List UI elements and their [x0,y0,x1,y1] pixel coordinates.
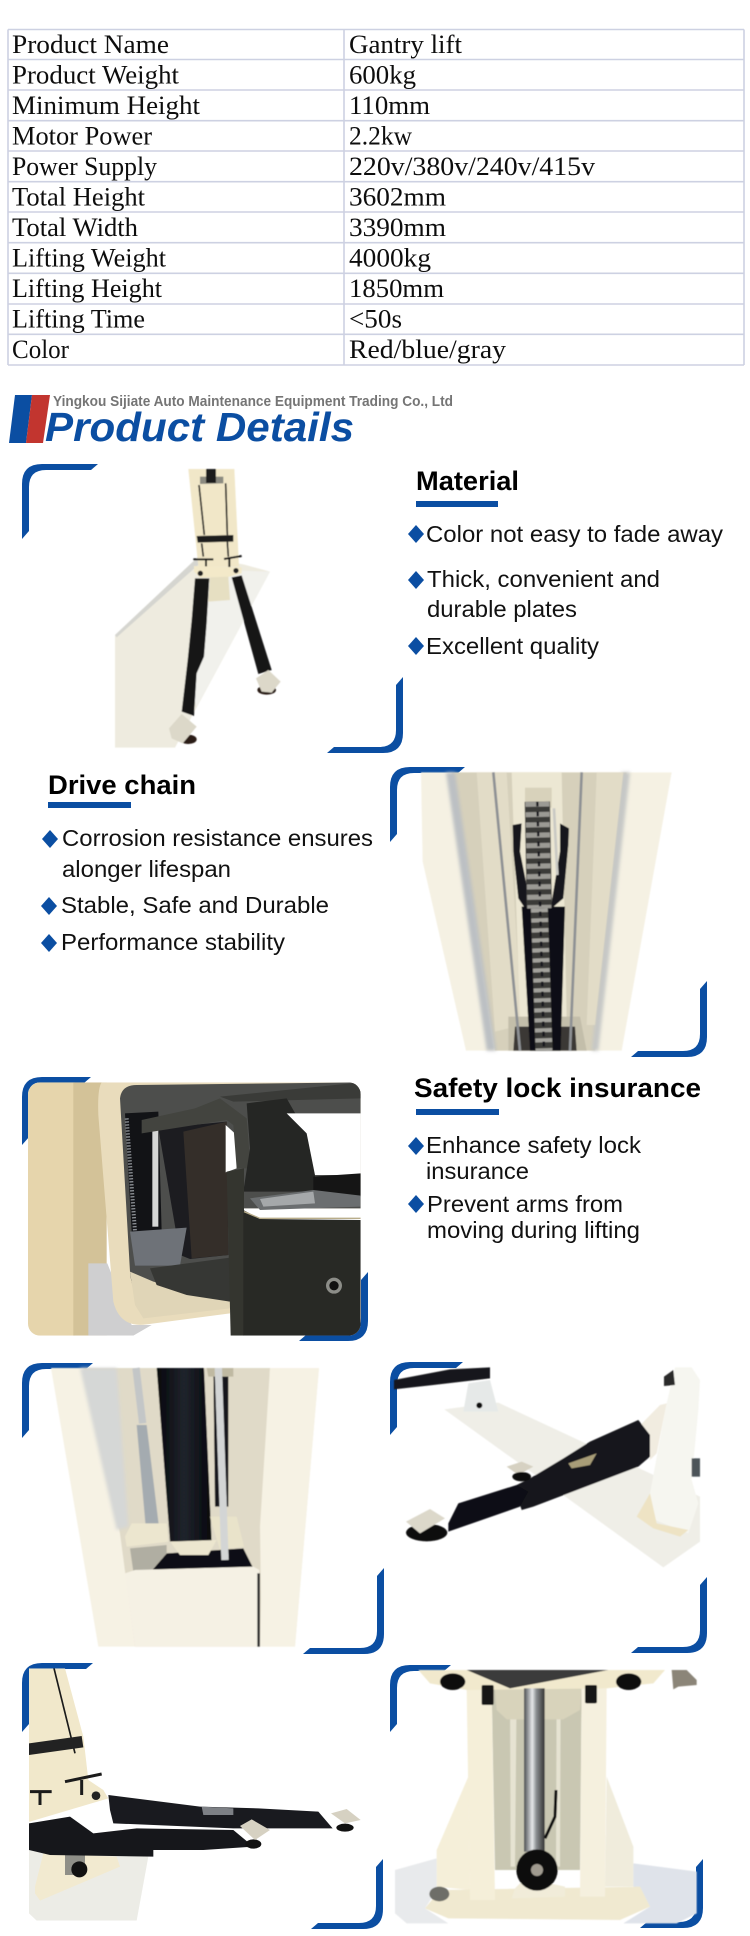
photo: drive chain inside column [421,772,672,1051]
specification table: Minimum Height [12,91,201,120]
photo: safety lock close-up [28,1082,361,1336]
bullet list: safety lock: Enhance safety lock [426,1132,642,1158]
bullet list: safety lock: moving during lifting [427,1217,640,1243]
specification table: <50s [349,304,402,334]
bullet list: material: Excellent quality [426,633,600,659]
bullet list: material: durable plates [427,596,577,622]
bullet list: drive chain [41,825,373,955]
corner brackets [22,464,403,753]
specification table [8,30,744,365]
corner brackets [22,1077,368,1341]
heading: material: Material [416,466,519,496]
specification table: Lifting Time [12,304,145,334]
specification table: 110mm [349,91,430,120]
photo: cylinder and cable [51,1368,319,1647]
bullet list: safety lock: Prevent arms from [427,1191,623,1217]
specification table: Gantry lift [349,30,463,59]
corner brackets [22,1663,383,1929]
panel: column base photo [390,1665,703,1928]
specification table: 4000kg [349,244,431,272]
corner brackets [390,1362,707,1653]
specification table: Total Width [12,213,138,242]
specification table: Total Height [12,182,146,212]
company name: Yingkou Sijiate Auto Maintenance Equipment Trading Co., Ltd [53,393,453,410]
bullet list: safety lock: insurance [426,1158,529,1184]
bullet list: drive chain: Stable, Safe and Durable [61,892,329,918]
panel: drive chain [41,767,707,1057]
corner brackets [390,767,707,1057]
specification table: Lifting Height [12,274,163,303]
specification table: 3390mm [349,213,446,242]
photo: lift arms from above [115,469,281,748]
photo: lift arm on base plate [394,1367,700,1567]
specification table: 2.2kw [349,122,412,150]
panel: material [22,464,724,753]
panel: arm over base plate photo [390,1362,707,1653]
specification table: 600kg [349,60,416,90]
specification table: Power Supply [12,152,157,181]
specification table: Product Weight [12,60,180,90]
heading: drive chain: Drive chain [48,770,196,800]
specification table: 220v/380v/240v/415v [349,152,595,181]
heading: product details: Product Details [45,404,354,450]
bullet list: material: Thick, convenient and [427,566,660,592]
corner brackets [390,1665,703,1928]
specification table: Product Name [12,30,169,59]
panel: safety lock insurance [22,1073,701,1341]
bullet list: drive chain: Corrosion resistance ensures [62,825,373,851]
logo mark [9,395,50,443]
bullet list: material [408,521,724,659]
bullet list: drive chain: alonger lifespan [62,856,231,882]
specification table: 1850mm [349,274,444,303]
corner brackets [22,1363,384,1654]
panel: side arms photo [22,1663,383,1929]
heading: safety lock insurance: Safety lock insurance [414,1073,701,1103]
photo: column base and roller [395,1670,697,1923]
specification table: Color [12,335,69,364]
specification table: Lifting Weight [12,244,167,272]
panel: cylinder photo [22,1363,384,1654]
photo: lift arms side view [29,1668,361,1921]
specification table: 3602mm [349,182,446,212]
bullet list: drive chain: Performance stability [61,929,286,955]
bullet list: safety lock [408,1132,642,1243]
specification table: Red/blue/gray [349,335,506,364]
specification table: Motor Power [12,122,152,150]
bullet list: material: Color not easy to fade away [426,521,724,547]
